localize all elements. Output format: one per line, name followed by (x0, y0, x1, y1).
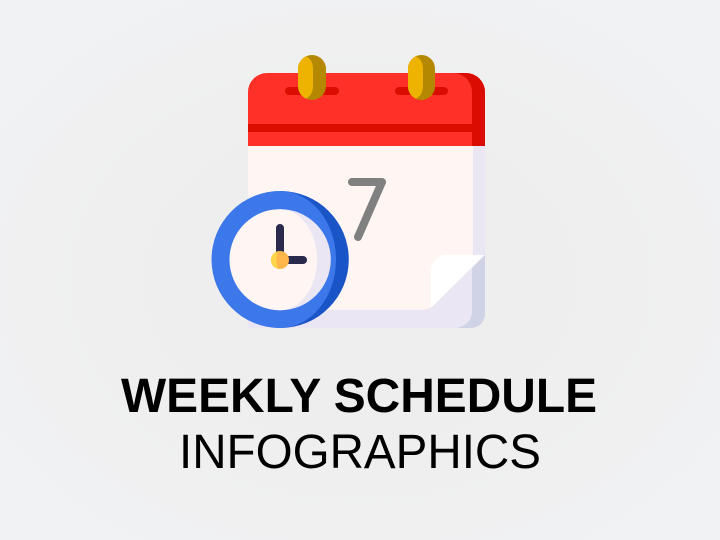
folded page corner (431, 255, 484, 308)
clock face (230, 209, 331, 310)
clock hub (271, 251, 289, 269)
clock outer ring (212, 191, 349, 328)
page shadow strip (455, 255, 485, 328)
clock hands (280, 228, 303, 260)
infographic canvas (121, 55, 596, 468)
title: WEEKLY SCHEDULE (121, 370, 597, 423)
right binder ring (408, 55, 435, 100)
calendar header (248, 73, 485, 146)
calendar icon (248, 55, 485, 328)
calendar page (248, 146, 485, 328)
number seven (352, 182, 382, 237)
subtitle: INFOGRAPHICS (179, 426, 541, 479)
clock icon (212, 191, 349, 328)
left binder ring (298, 55, 326, 100)
ring slots (285, 87, 448, 95)
